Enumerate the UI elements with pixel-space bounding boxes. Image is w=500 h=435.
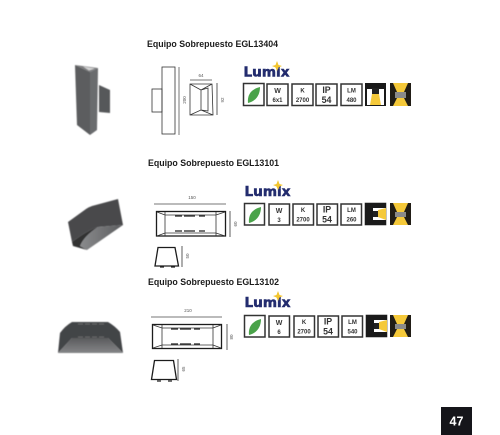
logo: Lumix: Lumix: [244, 185, 291, 200]
spec: watts: [269, 204, 290, 225]
section: EGL13102: [58, 276, 411, 381]
spec: IP: IP: [322, 85, 331, 95]
spec: kelvin: 2700: [296, 218, 310, 224]
icon: light beam side: [365, 203, 386, 225]
technical drawing: top and side: 150: [188, 195, 196, 200]
spec: lumens: [341, 204, 362, 225]
spec: IP: 54: [323, 326, 333, 336]
icon: leaf: [244, 316, 265, 337]
technical drawing: top and side: 65: [181, 366, 186, 372]
page number badge: [441, 407, 472, 435]
logo: Lumix: Lumix: [244, 296, 291, 311]
spec: kelvin: 2700: [297, 330, 311, 336]
spec: IP: IP: [323, 204, 331, 214]
title: EGL13404: Equipo Sobrepuesto EGL13404: [147, 38, 279, 49]
spec: lumens: [342, 316, 362, 337]
spec: watts: 3: [277, 218, 281, 224]
technical drawing: side and front: 200: [182, 96, 187, 104]
logo: Lumix: Lumix: [244, 66, 290, 80]
spec: IP: 54: [322, 214, 332, 224]
spec: lumens: LM: [348, 320, 357, 326]
icon: light beam side: [366, 315, 387, 337]
icon row: [244, 315, 411, 337]
icon: leaf: [244, 204, 264, 225]
spec: IP: 54: [322, 95, 331, 105]
icon row: [244, 83, 411, 106]
spec: watts: 6x1: [272, 98, 283, 104]
technical drawing: side and front: 64: [198, 73, 204, 78]
spec: IP: [317, 204, 338, 225]
spec: lumens: 260: [346, 218, 357, 224]
icon: leaf: [244, 84, 264, 106]
spec: IP: IP: [324, 316, 332, 326]
technical drawing: top and side: 60: [233, 221, 238, 227]
product photo: tall wall lamp: [75, 65, 110, 135]
product photo: half-moon wall lamp: [58, 322, 123, 353]
spec: lumens: 540: [347, 330, 358, 336]
spec: watts: [269, 316, 290, 337]
spec: IP: [318, 316, 338, 337]
spec: lumens: LM: [347, 208, 356, 214]
spec: kelvin: K: [302, 320, 307, 326]
technical drawing: top and side: [154, 195, 238, 267]
technical drawing: side and front: [152, 67, 225, 135]
icon row: [244, 203, 411, 225]
title: EGL13102: Equipo Sobrepuesto EGL13102: [148, 276, 279, 287]
icon: light beam up and down: [390, 83, 411, 106]
spec: watts: W: [274, 88, 281, 95]
technical drawing: top and side: 210: [184, 308, 192, 313]
spec: watts: [267, 84, 288, 106]
spec: kelvin: K: [300, 88, 305, 94]
spec: lumens: [341, 84, 362, 106]
icon: light beam up and down: [390, 315, 411, 337]
spec: kelvin: [294, 316, 314, 337]
icon: light beam down: [365, 83, 386, 106]
spec: lumens: LM: [347, 88, 356, 94]
section: EGL13101: [68, 157, 411, 267]
spec: lumens: 480: [346, 98, 357, 104]
spec: kelvin: 2700: [296, 98, 310, 104]
section: EGL13404: [75, 38, 411, 135]
icon: light beam up and down: [390, 203, 411, 225]
spec: kelvin: [292, 84, 313, 106]
spec: IP: [316, 84, 337, 106]
technical drawing: side and front: 92: [220, 97, 225, 103]
technical drawing: top and side: 50: [185, 253, 190, 259]
title: EGL13101: Equipo Sobrepuesto EGL13101: [148, 157, 279, 168]
page number badge: 47: [450, 414, 463, 428]
spec: watts: W: [276, 208, 283, 215]
spec: watts: 6: [277, 330, 281, 336]
technical drawing: top and side: [151, 308, 234, 381]
spec: kelvin: [293, 204, 314, 225]
spec: kelvin: K: [301, 208, 306, 214]
spec: watts: W: [276, 320, 283, 327]
product photo: angled wall lamp: [68, 199, 123, 250]
technical drawing: top and side: 80: [229, 334, 234, 340]
